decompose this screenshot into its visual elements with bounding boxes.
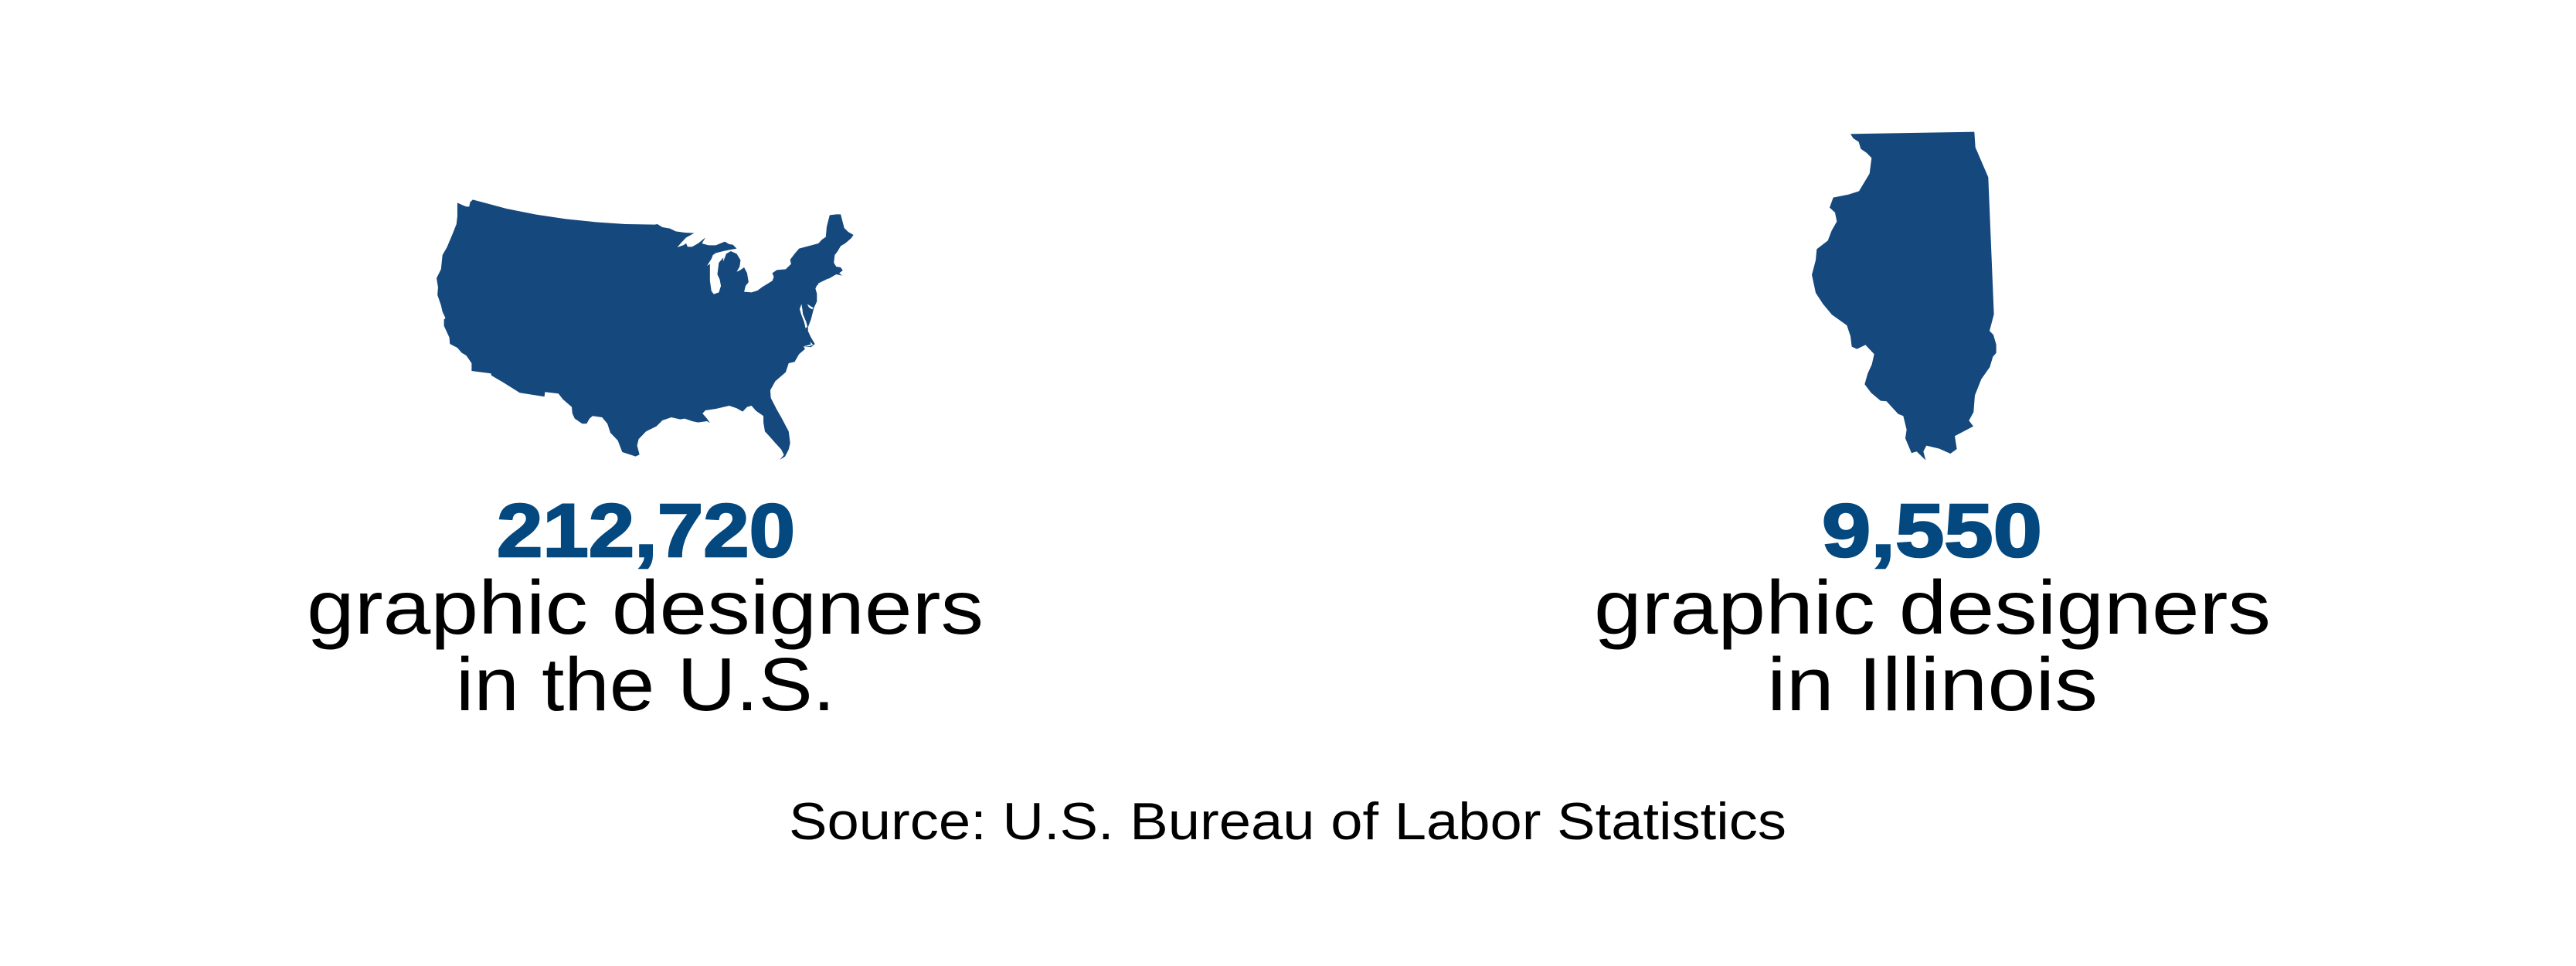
text: in the U.S.: in the U.S. — [456, 642, 835, 726]
icon: map of Illinois — [1812, 132, 1997, 461]
text: graphic designers: graphic designers — [307, 565, 984, 650]
big number: 9,550: 9,550 — [1822, 488, 2042, 573]
panel: United States statistic — [307, 199, 984, 726]
panel: Illinois statistic — [1594, 132, 2271, 726]
icon: map of the contiguous United States — [437, 199, 854, 460]
text: graphic designers: graphic designers — [1594, 565, 2271, 650]
source line: Source: U.S. Bureau of Labor Statistics — [789, 792, 1786, 851]
big number: 212,720: 212,720 — [497, 488, 795, 573]
text: in Illinois: in Illinois — [1767, 642, 2098, 726]
